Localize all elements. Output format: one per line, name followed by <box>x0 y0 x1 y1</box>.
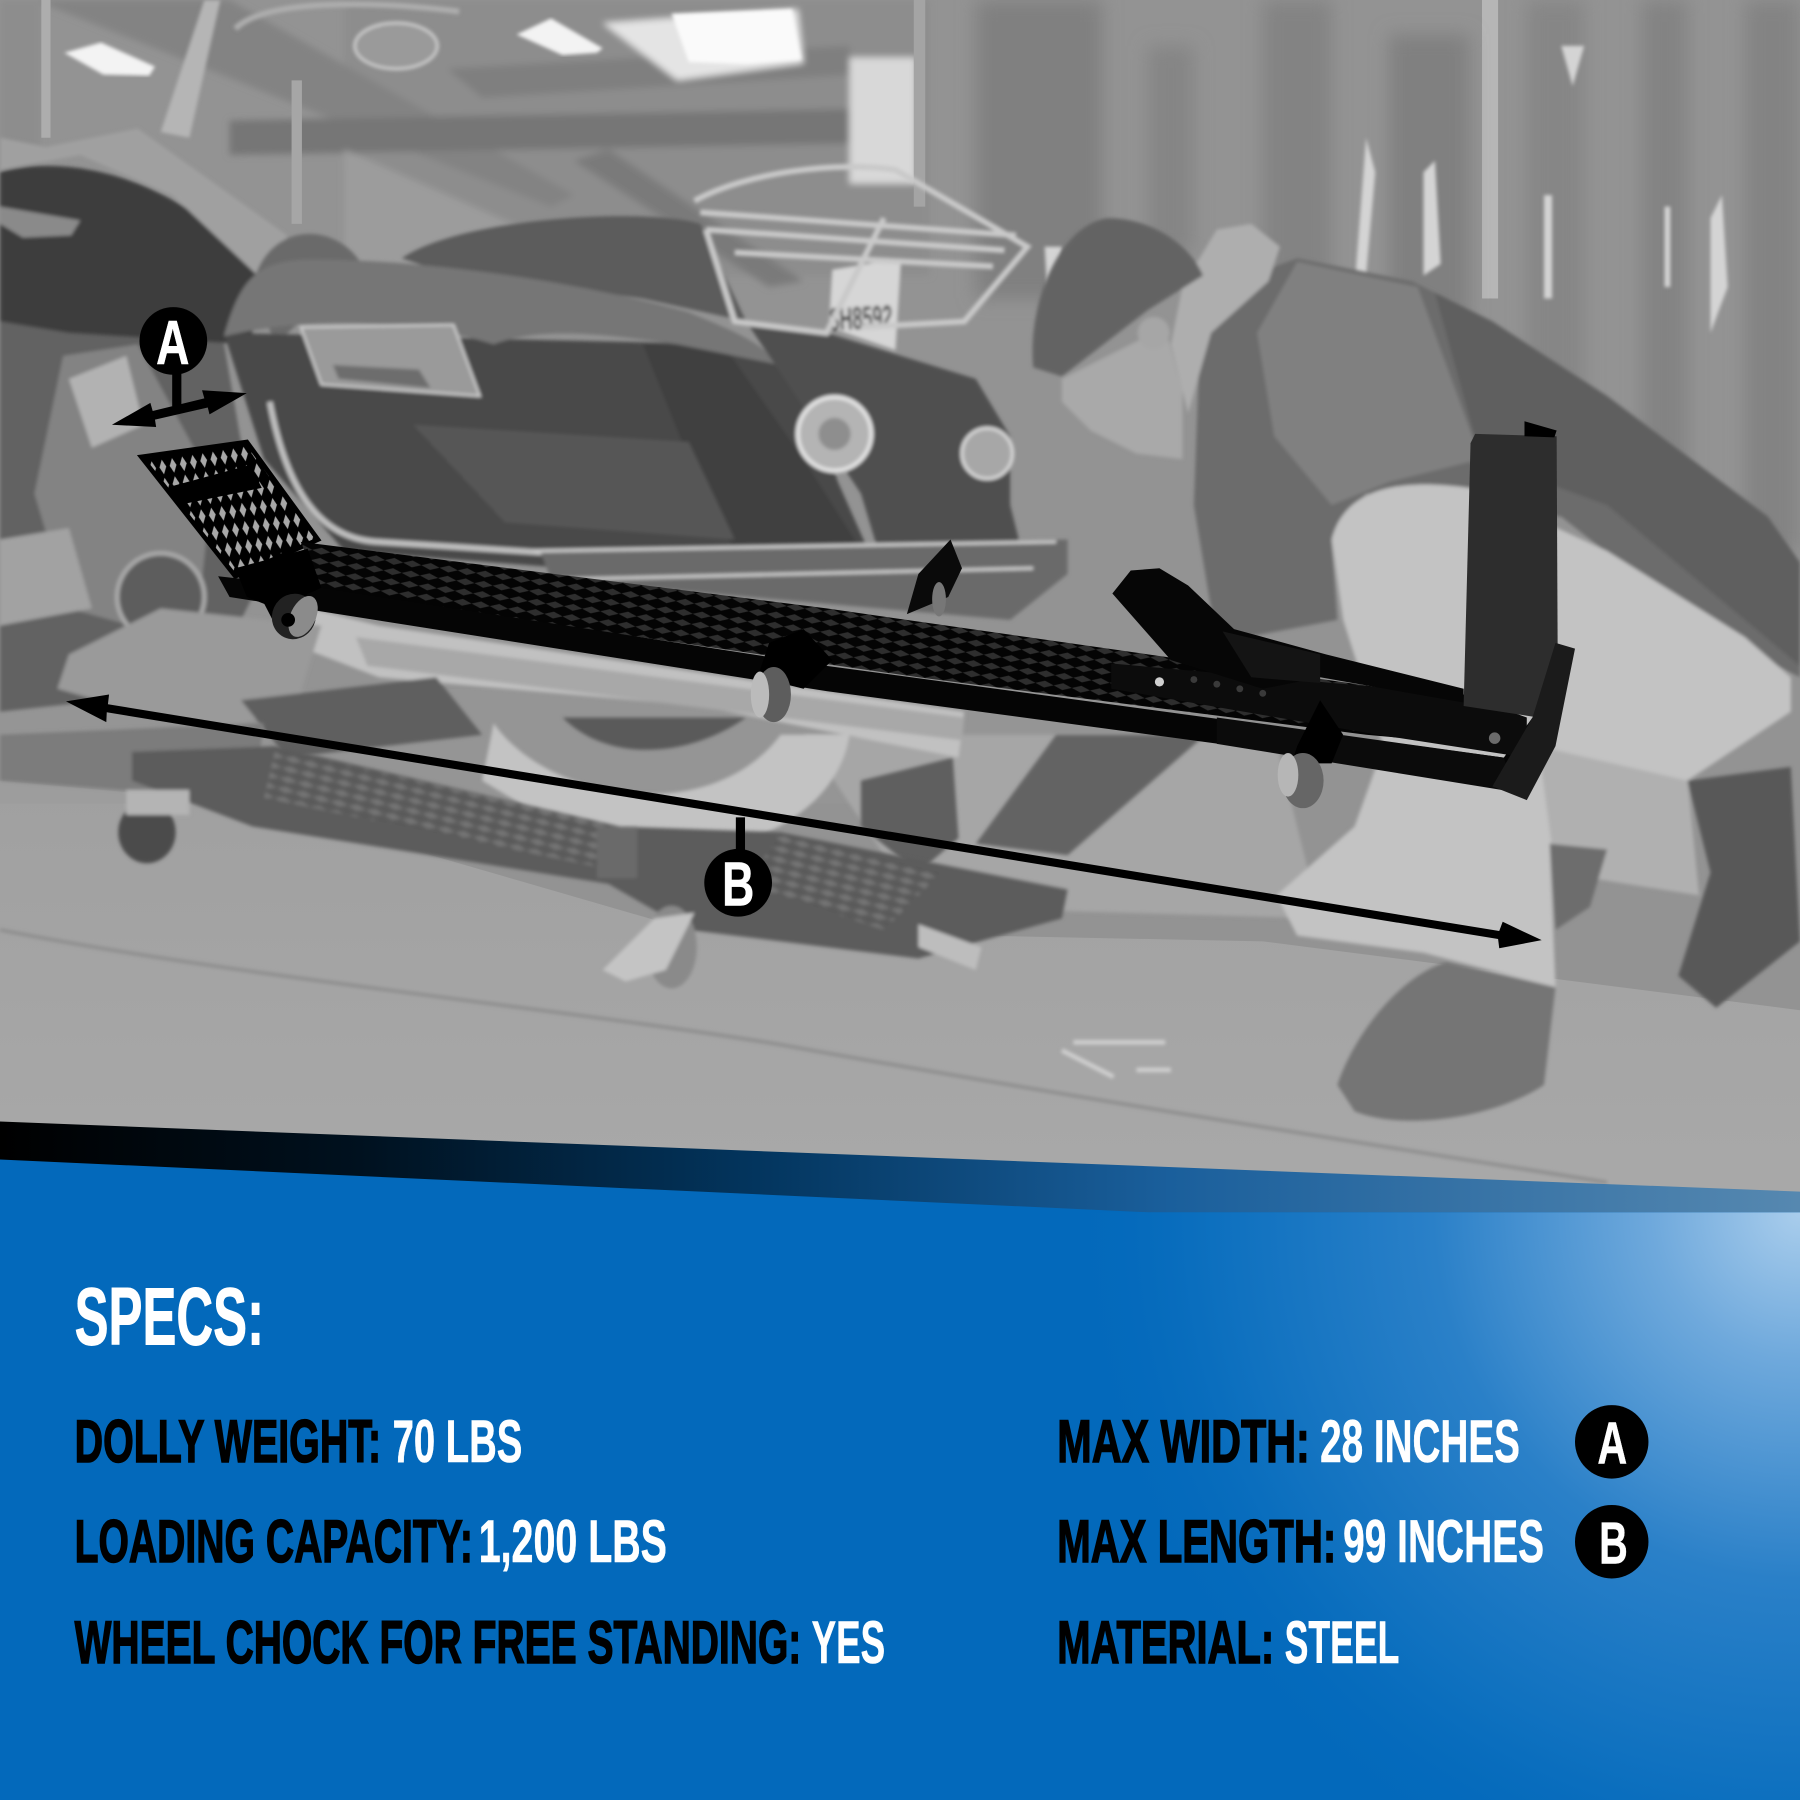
spec: max length: 99 INCHES <box>1343 1507 1544 1575</box>
rear fender and lights <box>746 321 1033 608</box>
ceiling lights <box>64 42 155 76</box>
adjustable chock bar <box>1111 664 1527 758</box>
spec: dolly weight: 70 LBS <box>393 1407 522 1475</box>
front rail <box>218 576 1533 792</box>
spec: max width: MAX WIDTH: <box>1057 1407 1310 1475</box>
ceiling and beams <box>0 0 930 287</box>
front caster <box>646 906 697 988</box>
badge B <box>1575 1505 1648 1578</box>
casters <box>255 540 1343 808</box>
spec: wheel chock: WHEEL CHOCK FOR FREE STANDING: <box>75 1608 801 1676</box>
luggage rack <box>695 167 1027 333</box>
photo: low dolly on floor <box>0 723 1171 1077</box>
saddlebag <box>224 333 884 585</box>
bandana <box>1033 218 1203 377</box>
lower chrome trim <box>270 402 987 585</box>
upright plate <box>1464 434 1558 717</box>
seat <box>253 234 362 344</box>
spec: material: MATERIAL: <box>1057 1608 1274 1676</box>
photo: motorcycle: 8H8592 <box>828 298 893 338</box>
photo: workshop background <box>0 0 1800 1217</box>
badge B: B <box>1599 1510 1628 1577</box>
front boot <box>1337 962 1555 1121</box>
tail lamp <box>301 325 480 396</box>
spec: material: STEEL <box>1285 1608 1399 1676</box>
lower engine <box>57 608 321 735</box>
badge A: A <box>1597 1410 1627 1477</box>
handlebar <box>161 0 220 138</box>
dark jack stand <box>861 758 959 872</box>
seat pad <box>224 259 781 365</box>
rear tyre <box>482 723 849 855</box>
dimension marker B <box>66 695 1542 948</box>
distant mid floor <box>804 735 1320 918</box>
photo: man crouching <box>976 218 1800 1121</box>
photo: motorcycle <box>0 0 1068 872</box>
arm shadow <box>976 735 1205 855</box>
small caster <box>118 801 176 863</box>
pipes <box>41 0 51 138</box>
badge A <box>1575 1405 1648 1479</box>
hood <box>1171 224 1280 413</box>
spec: wheel chock: YES <box>812 1608 885 1676</box>
wheel chock <box>1112 568 1464 703</box>
deck mesh <box>301 542 1492 746</box>
spec: dolly weight: DOLLY WEIGHT: <box>75 1407 381 1475</box>
licence plate <box>829 258 901 350</box>
dimension marker A: A <box>156 309 189 378</box>
rear engine area <box>0 310 264 712</box>
loose pin <box>1062 1042 1171 1077</box>
dimension marker B: B <box>722 851 754 920</box>
jacket <box>1194 258 1800 677</box>
spec: max length: MAX LENGTH: <box>1057 1507 1336 1575</box>
trousers <box>1277 484 1791 987</box>
ramp mesh <box>141 442 318 576</box>
back boot <box>1678 767 1800 1008</box>
spec: loading capacity: LOADING CAPACITY: <box>75 1507 473 1575</box>
panel: blue specs background <box>0 1157 1800 1800</box>
end bracket <box>1492 643 1575 800</box>
face <box>1062 327 1182 459</box>
diagonal gradient band <box>0 1122 1800 1212</box>
heading: specs: SPECS: <box>75 1271 264 1362</box>
shin shadow <box>1550 844 1607 930</box>
floor <box>0 781 1800 1217</box>
exhaust <box>304 608 964 758</box>
product: motorcycle dolly <box>141 421 1575 808</box>
curtain streaks <box>976 0 1800 551</box>
spec: loading capacity: 1,200 LBS <box>479 1507 667 1575</box>
fuel tank <box>0 166 270 344</box>
dimension marker A <box>112 307 247 427</box>
spec: max width: 28 INCHES <box>1320 1407 1520 1475</box>
